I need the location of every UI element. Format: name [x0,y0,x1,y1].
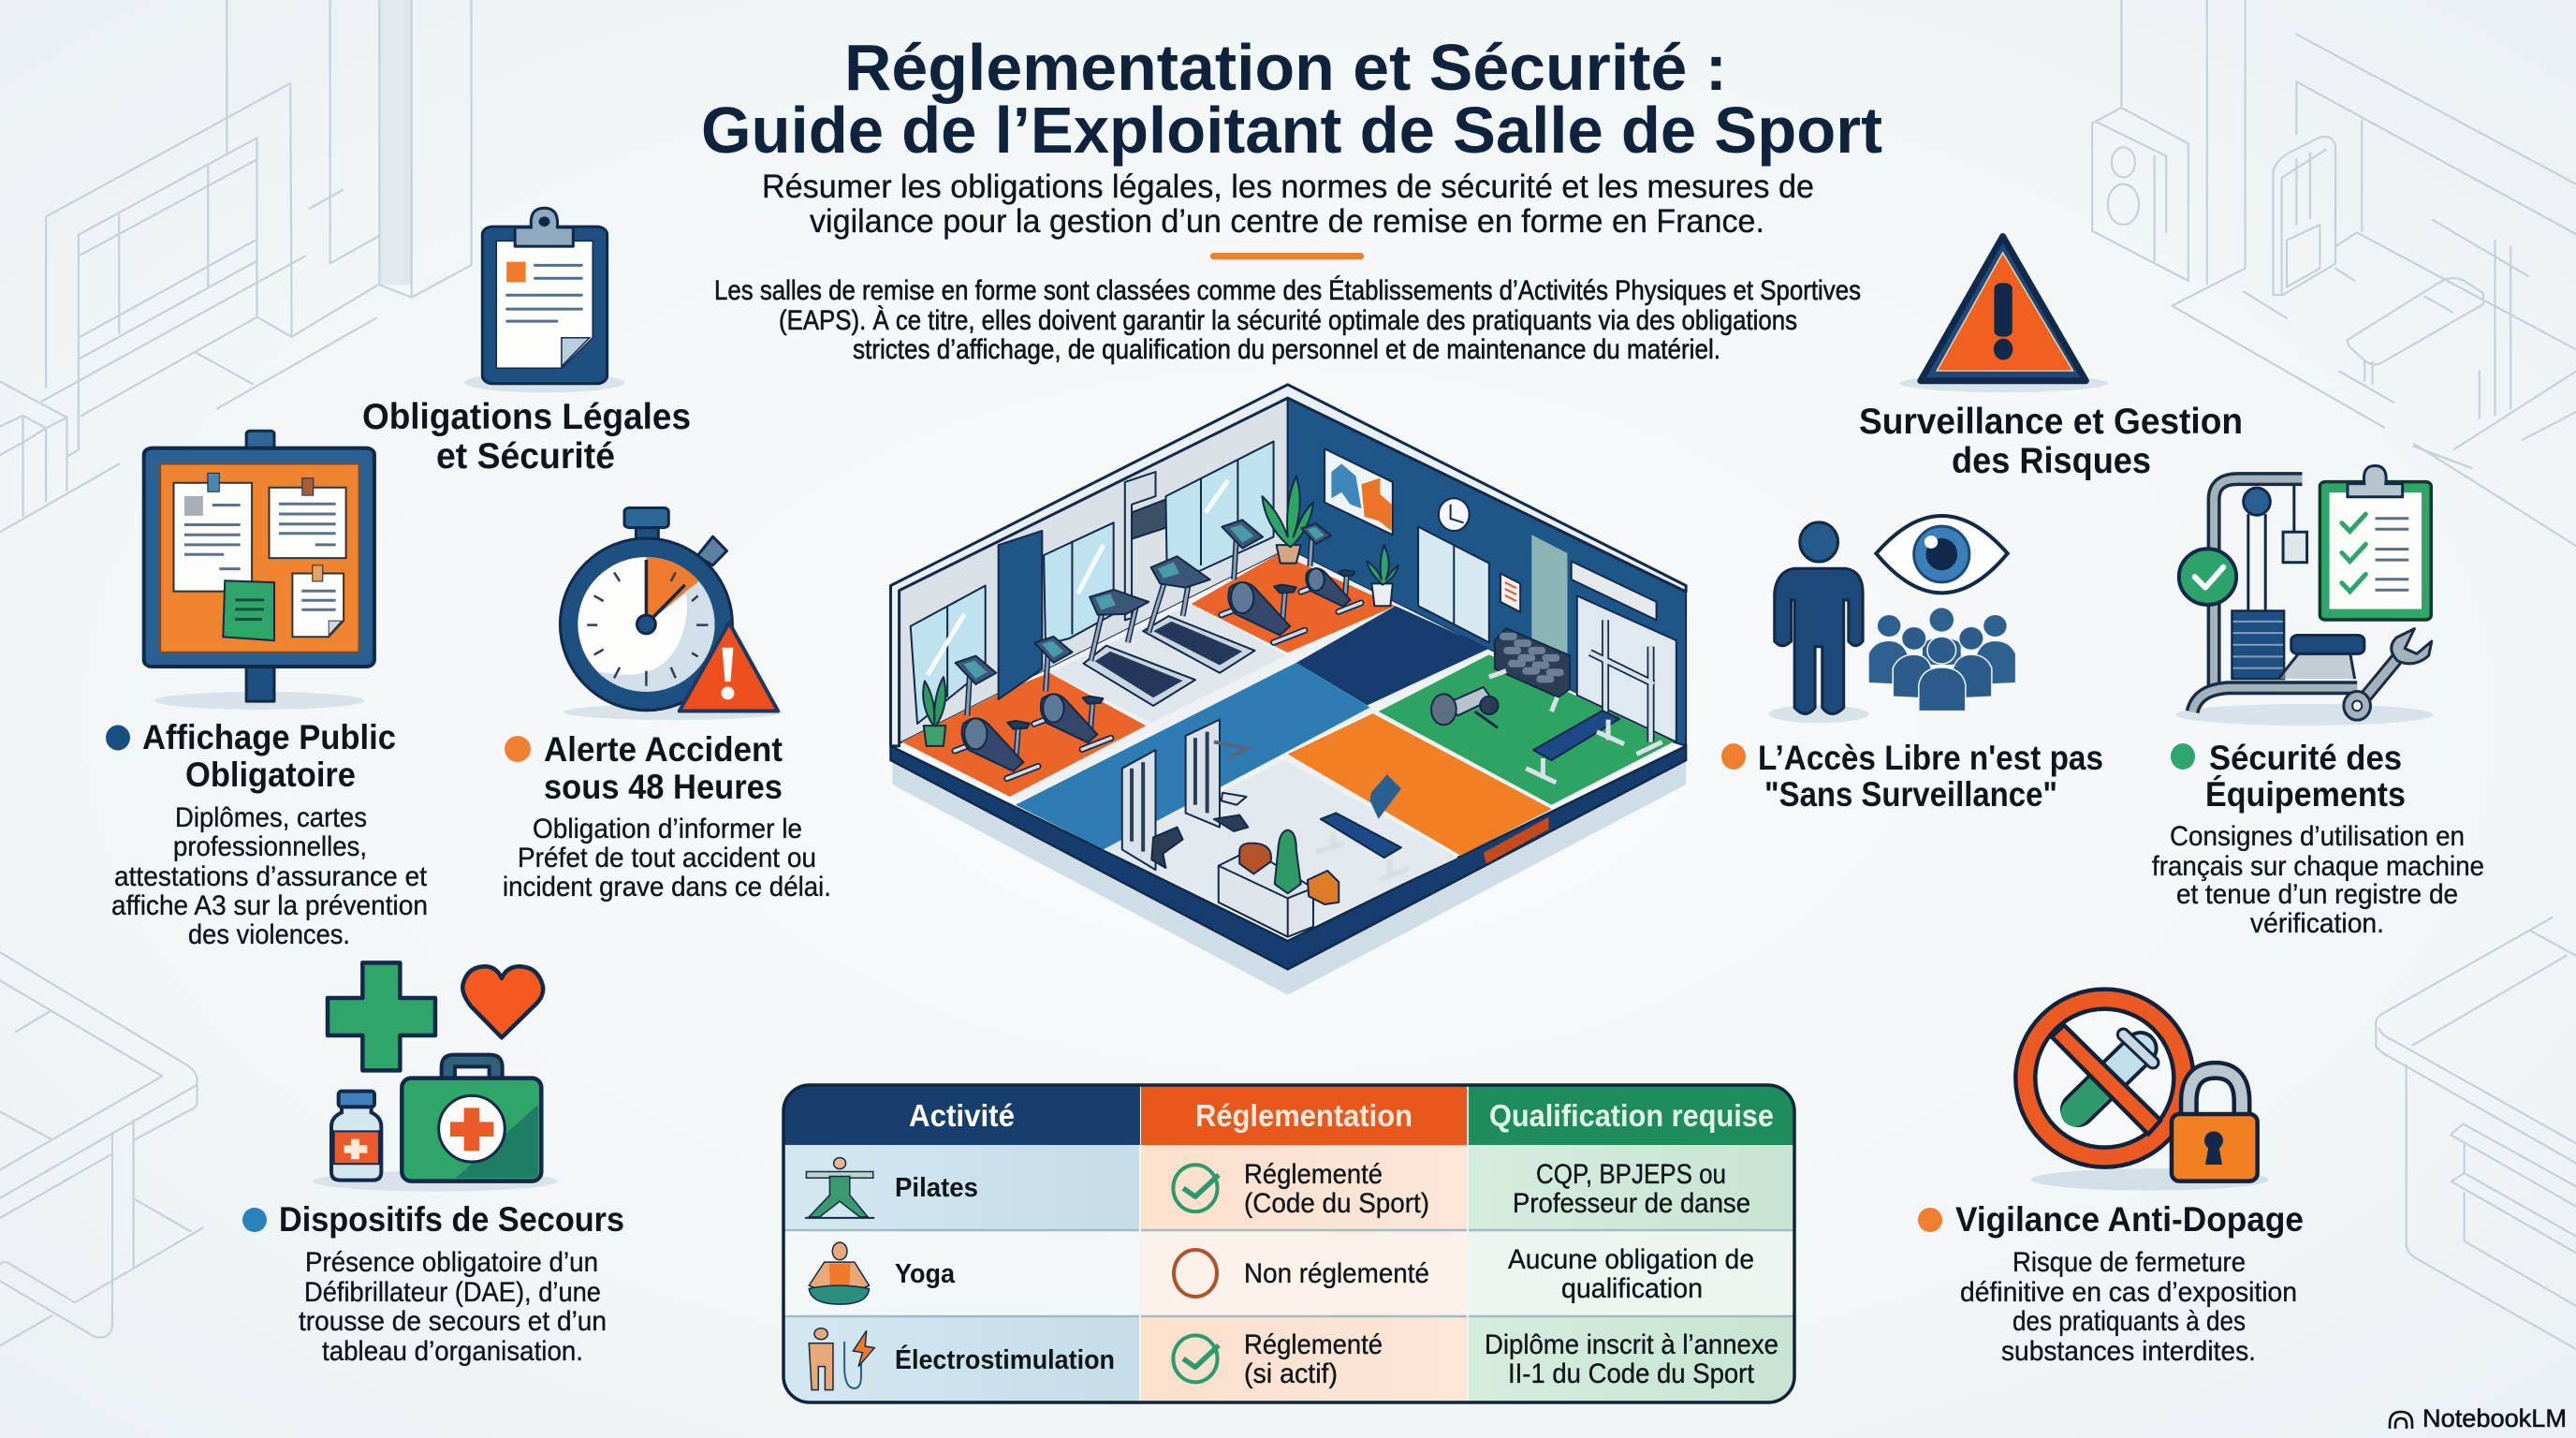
heading: alerte: Alerte Accident [544,730,783,769]
text: alerte: incident grave dans ce délai. [503,872,831,902]
text: alerte [503,814,831,902]
panel: accès libre [1721,516,2103,814]
panel: dispositifs de secours [242,962,624,1367]
bullet [505,736,531,762]
text: affichage: professionnelles, [173,831,367,862]
panel: surveillance et gestion [1859,237,2243,481]
free weights area [1431,620,1662,783]
row: électrostimulation: Électrostimulation [895,1343,1115,1375]
icon: weight machine, checklist and wrench [2175,465,2434,726]
icon: clipboard [464,208,624,392]
base plinth [891,746,1686,969]
table rounded border [783,1085,1794,1402]
ground shadow [892,756,1686,995]
text: affichage: des violences. [188,919,350,950]
text: affichage: Diplômes, cartes [175,802,367,833]
text: sécurité: français sur chaque machine [2152,851,2484,882]
left wall [891,385,1288,746]
text: dispositifs: Présence obligatoire d’un [305,1247,598,1278]
heading: alerte [505,730,783,806]
isometric gym illustration [891,385,1686,995]
icon: check [1173,1165,1219,1211]
text: sécurité: et tenue d’un registre de [2176,879,2458,910]
heading: surveillance: des Risques [1952,441,2151,481]
bullet [106,725,130,751]
orange zone back [1192,553,1396,653]
row: pilates: Pilates [895,1173,978,1203]
background sketch: top right gym [2092,0,2576,468]
background sketch: bottom left table [0,952,203,1345]
row: yoga: Aucune obligation de [1508,1244,1754,1275]
table cells [784,1145,1795,1402]
icon: check [1173,1335,1219,1382]
row: pilates [805,1158,1750,1219]
icon: electrostimulation [809,1328,874,1390]
orange rule [1210,253,1364,259]
icon: person, eye and crowd [1769,516,2015,723]
intro paragraph: (EAPS). À ce titre, elles doivent garantir la sécurité optimale des pratiquants via des obligations [779,305,1797,336]
heading: sécurité [2171,739,2406,814]
intro paragraph [714,275,1861,365]
cable machines [1122,720,1248,870]
text: alerte: Préfet de tout accident ou [518,843,816,873]
row: yoga: qualification [1561,1273,1703,1304]
text: dispositifs [299,1247,607,1367]
text: dispositifs: Défibrillateur (DAE), d’une [304,1277,601,1308]
table header: Qualification requise [1489,1098,1774,1133]
text: dispositifs: trousse de secours et d’un [299,1306,607,1337]
text: sécurité [2152,821,2484,939]
panel: vigilance anti-dopage [1918,990,2304,1367]
intro paragraph: Les salles de remise en forme sont classées comme des Établissements d’Activités Physiques et Sportives [714,275,1861,306]
icon: pilates pose [805,1158,874,1218]
heading: obligations [362,397,691,477]
icon: notice board [144,431,374,710]
row: pilates: Professeur de danse [1513,1188,1750,1219]
text: alerte: Obligation d’informer le [533,814,802,844]
notebooklm logo: NotebookLM [2422,1404,2567,1432]
heading: obligations: et Sécurité [436,436,615,477]
bench and accessories [1219,774,1410,937]
icon: notebooklm arcs [2390,1412,2412,1429]
floor [902,549,1674,940]
text: vigilance: définitive en cas d’exposition [1960,1277,2297,1308]
panel: sécurité des équipements [2152,465,2484,939]
heading: alerte: sous 48 Heures [544,768,783,806]
heading: accès libre: L’Accès Libre n'est pas [1758,739,2103,777]
panel: obligations légales [362,208,691,477]
row: électrostimulation [809,1328,1778,1390]
right wall decor [1325,448,1676,741]
text: vigilance: Risque de fermeture [2012,1247,2246,1278]
table: activity regulation [783,1085,1795,1402]
heading: vigilance: Vigilance Anti-Dopage [1955,1200,2304,1239]
bullet [2171,743,2195,770]
icon: stopwatch with warning [560,508,783,720]
exercise bikes [955,520,1361,779]
text: sécurité: Consignes d’utilisation en [2170,821,2465,852]
heading: affichage: Affichage Public [142,718,396,756]
heading: dispositifs: Dispositifs de Secours [279,1200,624,1239]
icon: forbidden test tube and padlock [2015,990,2268,1191]
heading: accès libre: "Sans Surveillance" [1764,775,2057,814]
row: électrostimulation: II-1 du Code du Sport [1508,1358,1755,1389]
heading: affichage [106,718,396,794]
treadmill zone [1049,604,1286,723]
plants [923,476,1398,746]
title [701,31,1882,167]
bullet [1721,743,1746,770]
table header: Réglementation [1195,1098,1412,1133]
treadmills [1084,556,1255,706]
heading: sécurité: Équipements [2205,775,2406,814]
wall top rim [891,385,1686,746]
text: vigilance: des pratiquants à des [2012,1306,2246,1337]
row: pilates: (Code du Sport) [1244,1188,1429,1219]
row: électrostimulation: Diplôme inscrit à l’annexe [1485,1329,1778,1360]
heading: sécurité: Sécurité des [2209,739,2402,777]
icon: empty circle [1174,1250,1217,1297]
subtitle [762,169,1814,240]
icon: first aid kit [313,962,558,1192]
left wall windows [911,442,1274,724]
heading: affichage: Obligatoire [185,756,356,794]
row: électrostimulation: (si actif) [1244,1358,1338,1389]
bullet [242,1208,267,1232]
row: pilates: Réglementé [1244,1159,1383,1190]
title: Réglementation et Sécurité : [844,31,1727,104]
table header [783,1085,1794,1145]
text: affichage: affiche A3 sur la prévention [111,890,428,921]
right wall [1288,385,1686,746]
background sketch: right floor line [2414,444,2576,546]
heading: surveillance [1859,402,2243,481]
icon: yoga pose [809,1242,870,1304]
subtitle: vigilance pour la gestion d’un centre de remise en forme en France. [810,203,1764,240]
text: vigilance [1960,1247,2297,1367]
row: yoga: Yoga [895,1259,956,1289]
row: électrostimulation: Réglementé [1244,1329,1383,1360]
plinth accent [1484,817,1548,864]
icon: warning triangle [1899,237,2108,392]
subtitle: Résumer les obligations légales, les normes de sécurité et les mesures de [762,169,1814,205]
title: Guide de l’Exploitant de Salle de Sport [701,94,1882,167]
text: vigilance: substances interdites. [2001,1336,2256,1367]
text: affichage: attestations d’assurance et [114,861,428,892]
green zone [1379,654,1674,805]
blue zone [1016,663,1370,849]
text: dispositifs: tableau d’organisation. [322,1336,583,1367]
light zone front [1104,760,1458,937]
row: yoga: Non réglementé [1244,1258,1429,1289]
heading: accès libre [1721,739,2103,814]
navy zone [1296,606,1489,705]
panel: affichage public [106,431,428,950]
table header: Activité [909,1098,1015,1133]
row: yoga [809,1242,1754,1304]
text: sécurité: vérification. [2250,908,2384,939]
orange zone front [1288,713,1552,856]
orange zone left [902,673,1146,797]
intro paragraph: strictes d’affichage, de qualification du personnel et de maintenance du matériel. [853,334,1720,365]
background sketch: bottom right cabinet [2376,917,2576,1349]
row: pilates: CQP, BPJEPS ou [1536,1159,1726,1190]
text: affichage [111,802,428,950]
panel: alerte accident [503,508,831,902]
heading: surveillance: Surveillance et Gestion [1859,402,2243,442]
heading: obligations: Obligations Légales [362,397,691,437]
background sketch: top left windows [0,0,472,532]
bullet [1918,1208,1942,1232]
